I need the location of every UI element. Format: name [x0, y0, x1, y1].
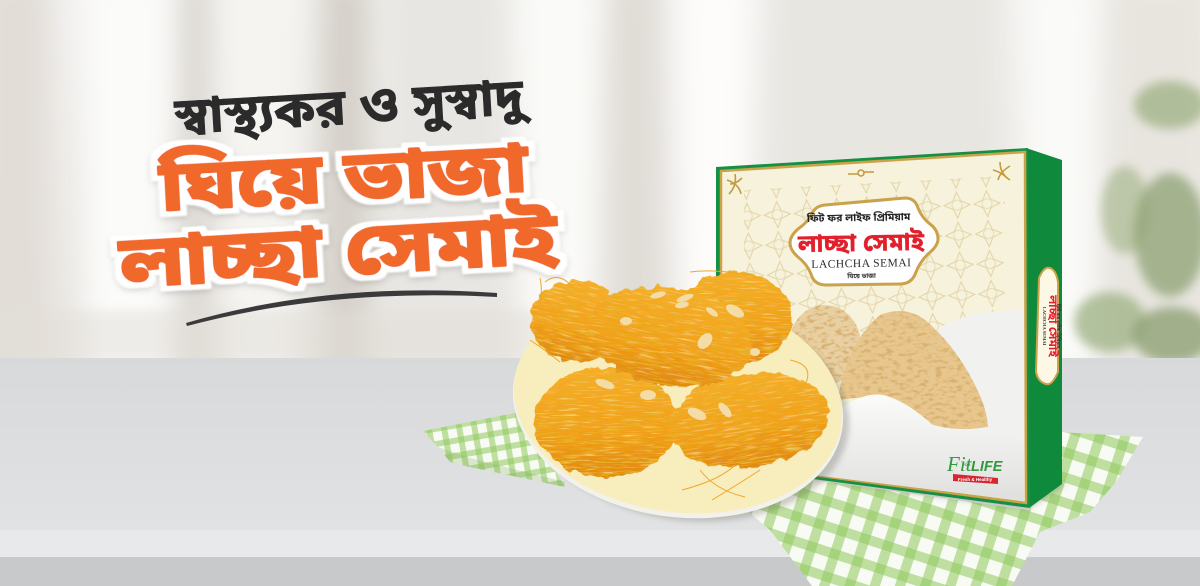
- box title text: ফিট ফর লাইফ প্রিমিয়াম: [806, 210, 911, 225]
- box side label: LACHCHA SEMAI: [1042, 307, 1047, 346]
- product box: [716, 148, 1066, 509]
- nest: bottom left: [534, 367, 678, 477]
- semai nests: [523, 271, 835, 500]
- underline swoosh: [186, 290, 497, 326]
- box noodles photo: [789, 305, 988, 430]
- stray strands: [530, 271, 819, 500]
- box title text: LACHCHA SEMAI: [811, 257, 912, 271]
- box side label: [1036, 268, 1061, 384]
- logo tagline: [953, 474, 998, 484]
- box front: cream label: [721, 152, 1026, 503]
- almond flakes: [594, 290, 760, 423]
- box logo: FOR: [962, 462, 971, 467]
- box title plate: [790, 198, 938, 285]
- plate: [498, 270, 864, 542]
- box title text: লাচ্ছা সেমাই: [797, 227, 925, 258]
- plate rim: [498, 271, 858, 539]
- box logo: LIFE: [971, 459, 1004, 475]
- heading: ghee fried: ঘিয়ে ভাজা: [157, 128, 531, 226]
- box logo: Fit: [946, 452, 973, 476]
- background plant: [1074, 81, 1200, 363]
- box front: green edge: [716, 148, 1030, 508]
- heading: lachcha semai: লাচ্ছা সেমাই: [117, 197, 561, 303]
- box side label: ফিট ফর লাইফ প্রিমিয়াম: [1056, 303, 1061, 348]
- nest: bottom right: [663, 362, 835, 478]
- box logo: Fresh & Healthy: [958, 477, 993, 482]
- box logo: [946, 452, 1004, 484]
- box corner ornaments: [727, 162, 1010, 194]
- box lattice pattern: [744, 176, 1005, 345]
- cloth: right side: [727, 432, 1143, 586]
- box shadow: [803, 470, 1066, 509]
- nest: center top: [580, 274, 760, 400]
- box side: green: [1026, 148, 1062, 508]
- nest: back right: [677, 272, 793, 364]
- heading: healthy and tasty: স্বাস্থ্যকর ও সুস্বাদু: [172, 68, 532, 147]
- box front milk wave: [790, 394, 1024, 501]
- box title text: [796, 210, 925, 281]
- box title text: ঘিয়ে ভাজা: [846, 272, 876, 280]
- background: blurred window wall: [0, 0, 1200, 380]
- counter top: [0, 358, 1200, 586]
- plate shadow: [508, 278, 864, 542]
- box side label: লাচ্ছা সেমাই: [1046, 294, 1061, 357]
- plate surface: [499, 270, 857, 534]
- box back milk wave: [937, 310, 1023, 445]
- nest: back left: [523, 273, 633, 371]
- cloth: left corner: [423, 412, 565, 487]
